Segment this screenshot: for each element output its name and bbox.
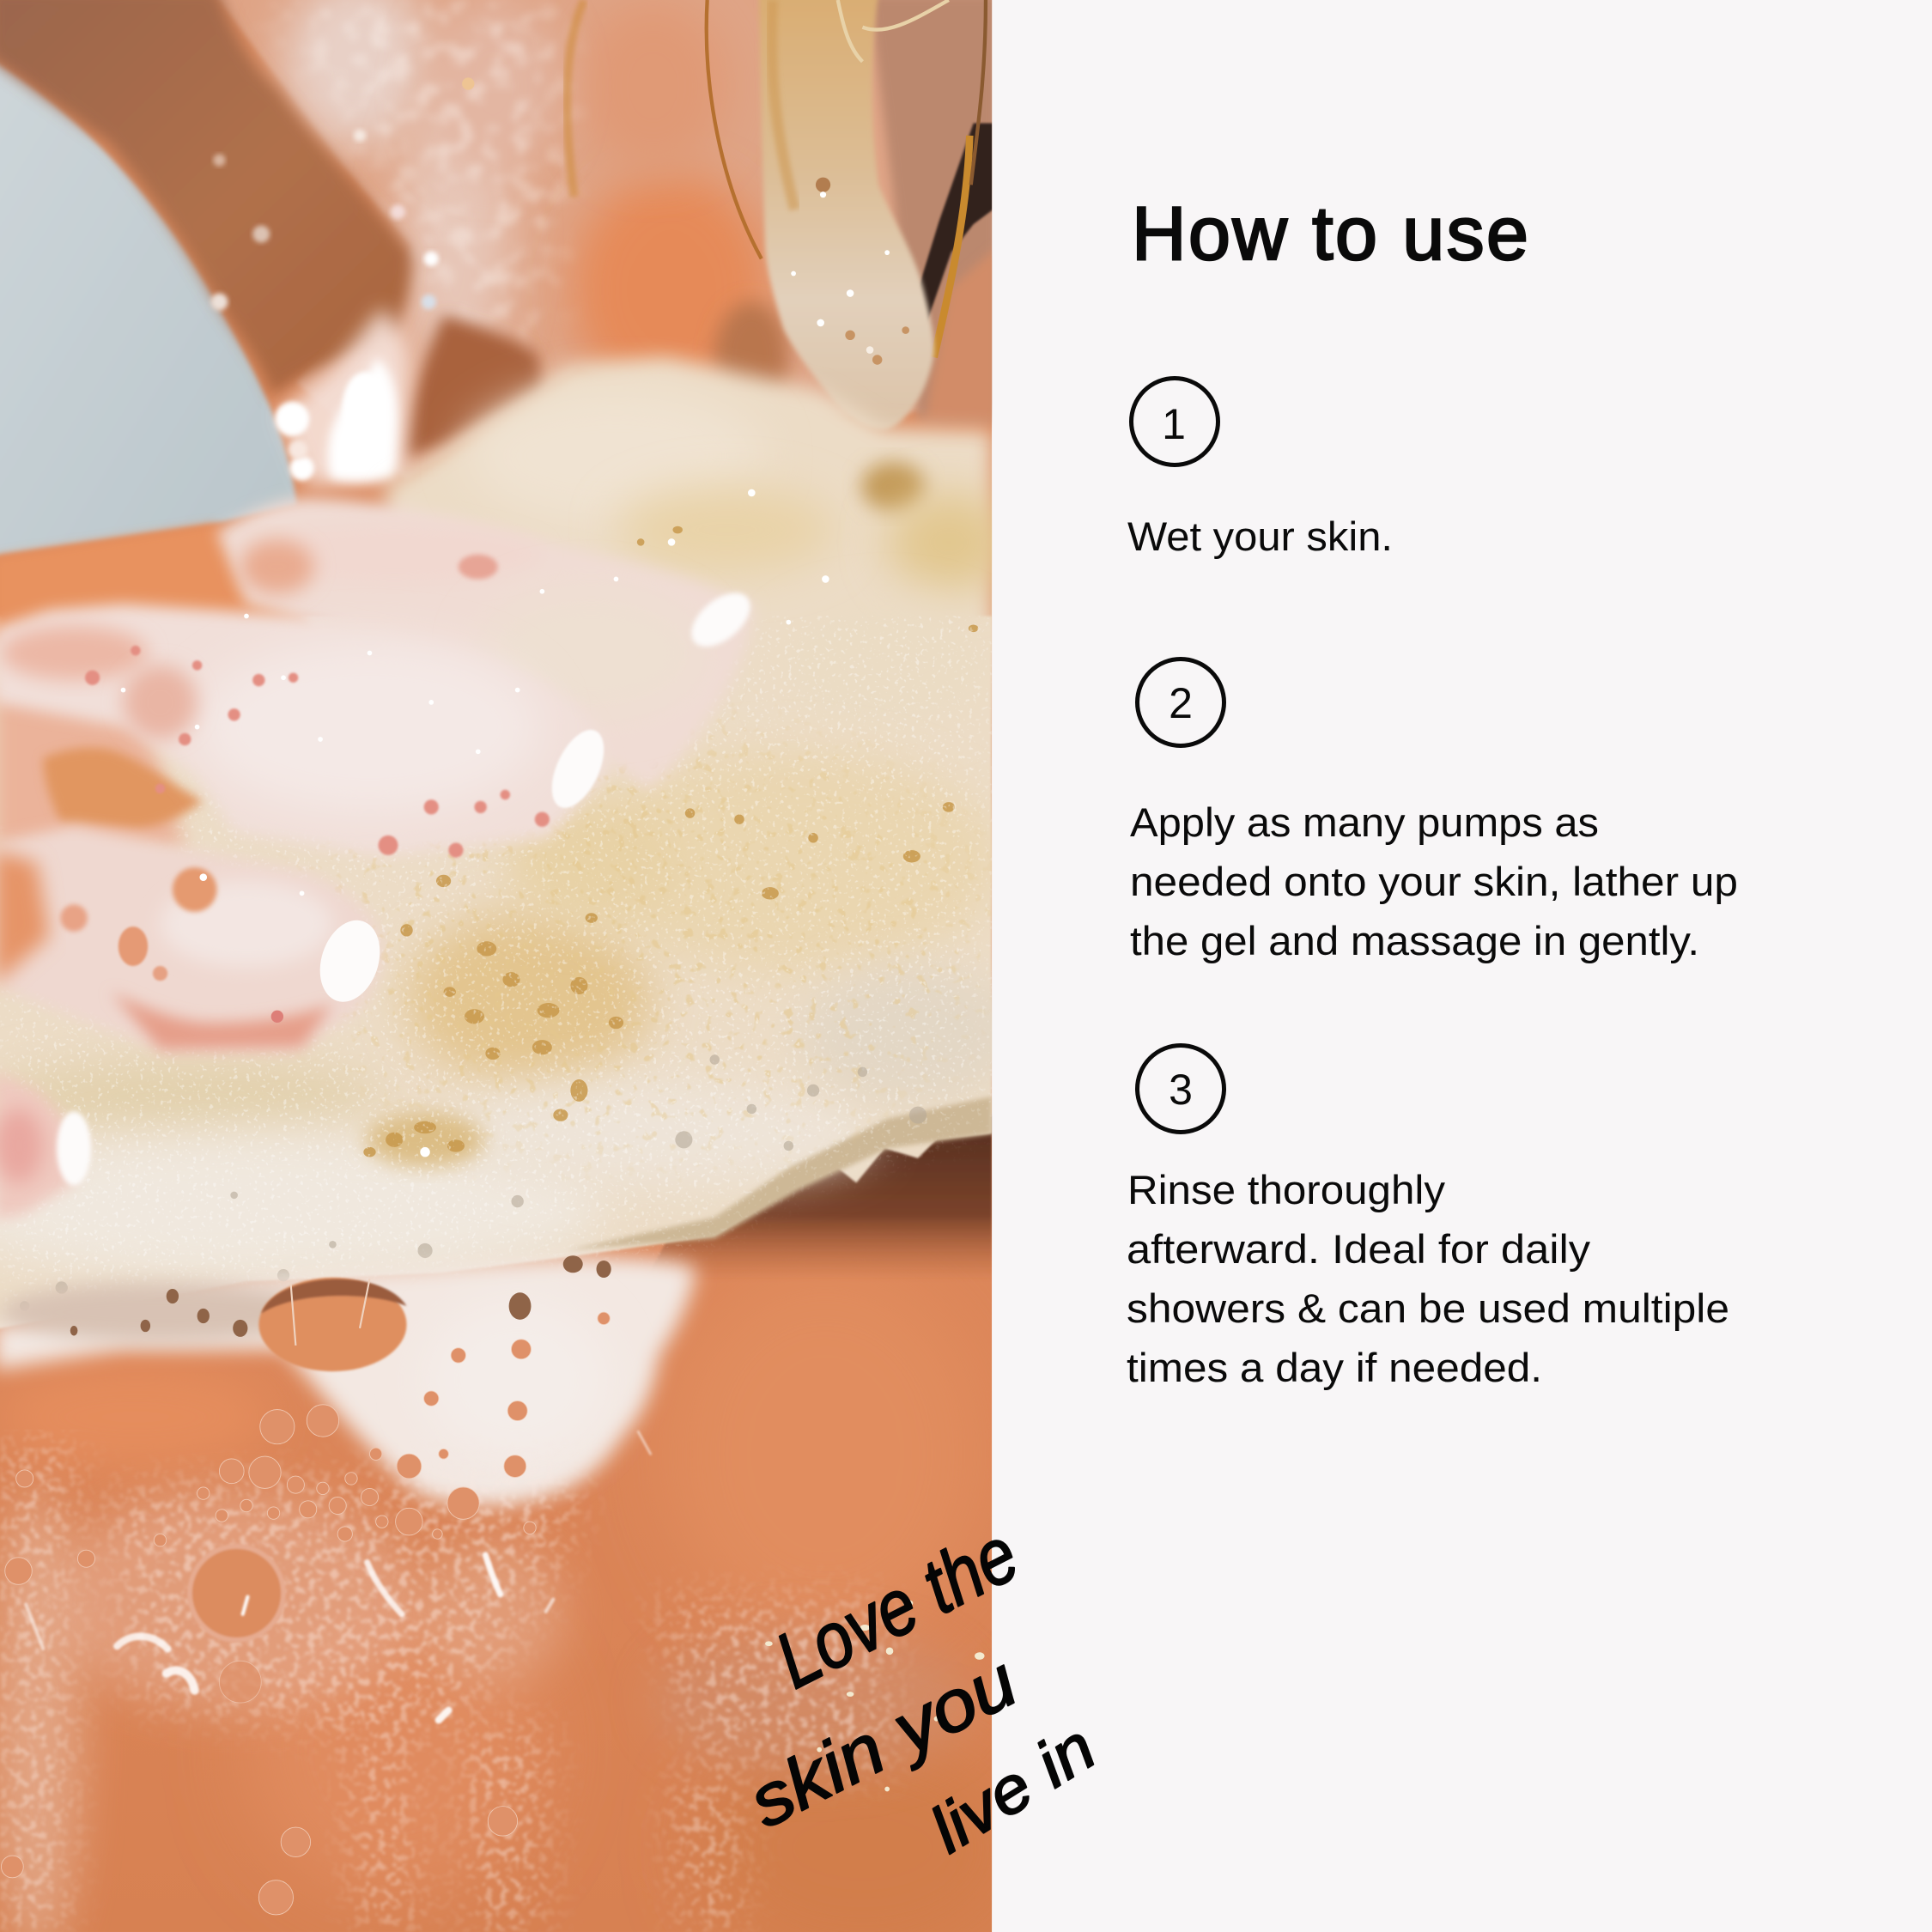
wet hair strand [759, 0, 949, 430]
mottled foam on neck [312, 0, 580, 339]
large bubble hole in foam [258, 1278, 407, 1371]
lower brown shadow on chest [404, 315, 544, 459]
left foam base between fingers [0, 683, 185, 850]
finger two with foam [0, 604, 610, 858]
step 2 text: the gel and massage in gently. [1130, 919, 1699, 964]
foam bubble grain on loofah [0, 616, 992, 1331]
handwritten slogan: skin you [736, 1640, 1030, 1843]
step 3 text: Rinse thoroughly [1127, 1168, 1445, 1213]
foam under loofah [0, 1257, 696, 1505]
step 2 text: needed onto your skin, lather up [1130, 860, 1738, 905]
salmon bubbles in foam [1, 1312, 610, 1915]
step 2 [1130, 659, 1738, 964]
step 2 number badge [1137, 659, 1224, 745]
step 2 number badge: 2 [1169, 679, 1193, 727]
neck skin and foam [210, 0, 998, 481]
finger four with foam [0, 1072, 84, 1220]
skin tone variation on lower torso [0, 1269, 1023, 1932]
finger gap skin [43, 748, 204, 828]
white fingernails [57, 582, 760, 1185]
step 3 number badge [1137, 1046, 1224, 1132]
mottled foam on lower torso [0, 1430, 937, 1932]
large wet bubble [190, 1546, 283, 1640]
step 3 text: afterward. Ideal for daily [1127, 1227, 1590, 1273]
white foam splash [210, 77, 474, 487]
step 2 text [1130, 800, 1738, 964]
small highlights on fingers [121, 489, 829, 1157]
photo: foam and loofah on skin [0, 0, 1023, 1932]
shadow under loofah [641, 1115, 992, 1288]
step 3 number badge: 3 [1169, 1066, 1193, 1114]
step 1 number badge [1132, 378, 1218, 465]
loofah fibre texture [271, 690, 992, 1183]
glossy water highlights [26, 1431, 651, 1720]
step 2 text: Apply as many pumps as [1130, 800, 1599, 846]
handwritten slogan: live in [918, 1710, 1108, 1867]
dark foam bubbles [70, 1255, 611, 1337]
bokeh droplets under slogan [765, 1600, 985, 1791]
arm behind fingers [0, 524, 320, 665]
gold loofah pores [363, 526, 978, 1157]
loofah and foam mass [0, 357, 1023, 1331]
title: How to use [1132, 191, 1528, 276]
finger three with foam [0, 825, 383, 1050]
skin behind hair [567, 0, 998, 425]
grey backdrop [0, 57, 297, 557]
finger one with foam [217, 498, 754, 788]
handwritten slogan: Love the [762, 1510, 1031, 1705]
step 1 number badge: 1 [1162, 400, 1186, 448]
grey foam dimples on lower rim [20, 1054, 927, 1311]
step 1 text: Wet your skin. [1127, 514, 1393, 560]
step 3 text: showers & can be used multiple [1127, 1286, 1729, 1332]
step 3 text: times a day if needed. [1127, 1346, 1542, 1391]
handwritten slogan [736, 1510, 1108, 1867]
brown underarm shadow [0, 0, 411, 397]
step 1 [1127, 378, 1393, 560]
step 3 text [1127, 1168, 1729, 1391]
step 3 [1127, 1046, 1729, 1391]
